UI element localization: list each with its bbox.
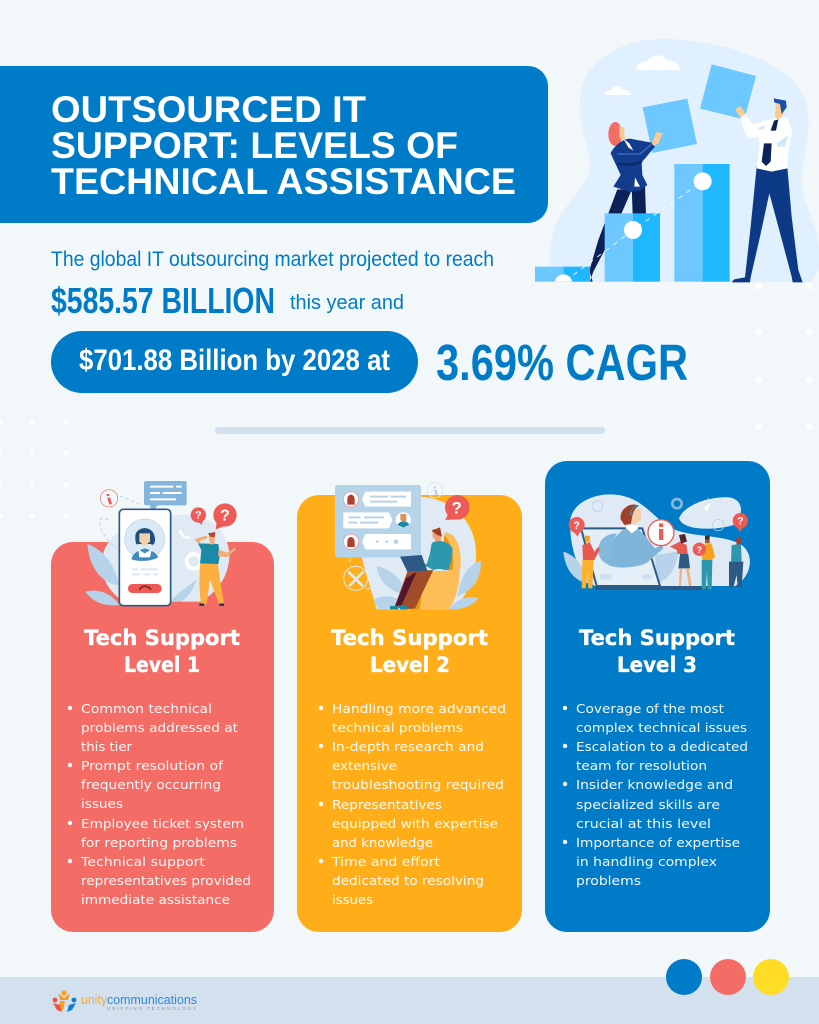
text: level 1 bullet list: Technical support <box>80 854 205 869</box>
heading: tech support level 1: Tech Support <box>84 626 240 651</box>
text: level 2 bullet list: dedicated to resolving <box>332 873 484 888</box>
text: level 2 bullet list: and knowledge <box>332 835 433 850</box>
decorative colour dots <box>666 959 789 995</box>
title banner: TECHNICAL ASSISTANCE <box>51 161 516 202</box>
pill: $701.88 billion by 2028: $701.88 Billion by 2028 at <box>79 344 390 377</box>
heading: tech support level 2: Tech Support <box>331 626 488 651</box>
text: level 2 bullet list: Representatives <box>332 797 442 812</box>
text: level 3 bullet list: problems <box>576 873 641 888</box>
text: level 2 bullet list: troubleshooting required <box>332 777 504 792</box>
icon: helpdesk agent illustration: ? <box>737 516 744 528</box>
icon: helpdesk agent illustration: ? <box>696 545 702 555</box>
text: level 1 bullet list: immediate assistance <box>81 892 230 907</box>
text: level 3 bullet list: Insider knowledge and <box>576 777 733 792</box>
text: level 2 bullet list: equipped with expertise <box>332 816 498 831</box>
icon: helpdesk agent illustration <box>563 494 750 590</box>
text: level 1 bullet list: Prompt resolution of <box>81 758 224 773</box>
heading: tech support level 2: Level 2 <box>370 653 450 678</box>
text: level 1 bullet list: for reporting problems <box>81 835 237 850</box>
text: level 3 bullet list: crucial at this level <box>576 816 711 831</box>
text: level 2 bullet list: technical problems <box>332 720 463 735</box>
market statistic intro: The global IT outsourcing market projected to reach <box>51 248 494 271</box>
text: level 3 bullet list: team for resolution <box>576 758 707 773</box>
icon: remote chat support illustration: ? <box>452 498 462 517</box>
text: this year and: this year and <box>290 292 404 314</box>
text: level 3 bullet list: in handling complex <box>576 854 718 869</box>
hero illustration: team building a bar chart <box>535 39 819 282</box>
panel: tech support level 2 <box>297 482 522 932</box>
statistic: 3.69% CAGR: 3.69% CAGR <box>436 334 688 391</box>
text: level 2 bullet list: issues <box>332 892 373 907</box>
pill: $701.88 billion by 2028 <box>51 331 418 393</box>
icon: remote chat support illustration <box>335 482 481 609</box>
heading: tech support level 2 <box>331 626 488 678</box>
heading: tech support level 3 <box>579 626 735 678</box>
text: level 3 bullet list <box>563 701 748 888</box>
panel: tech support level 3 <box>545 461 770 932</box>
text: level 1 bullet list: frequently occurring <box>81 777 221 792</box>
icon: phone support illustration: ? <box>195 510 202 522</box>
text: level 2 bullet list: extensive <box>332 758 397 773</box>
heading: tech support level 1 <box>84 626 240 678</box>
text: level 1 bullet list: problems addressed at <box>81 720 238 735</box>
footer band <box>0 977 819 1024</box>
text: level 1 bullet list: Employee ticket system <box>81 816 244 831</box>
text: level 3 bullet list: Coverage of the most <box>576 701 724 716</box>
text: level 2 bullet list <box>319 701 506 907</box>
text: level 2 bullet list: Handling more advanced <box>332 701 506 716</box>
title banner: SUPPORT: LEVELS OF <box>51 125 458 166</box>
text: level 2 bullet list: Time and effort <box>331 854 440 869</box>
icon: helpdesk agent illustration: ? <box>573 520 580 532</box>
title banner <box>0 66 548 223</box>
logo: unity communications: UNIFYING TECHNOLOGY <box>107 1006 196 1011</box>
text: level 3 bullet list: Importance of expertise <box>576 835 740 850</box>
icon: phone support illustration <box>85 481 237 606</box>
icon: phone support illustration: ? <box>220 508 230 525</box>
logo: unity communications <box>53 990 197 1012</box>
text: level 1 bullet list: this tier <box>81 739 133 754</box>
statistic: $585.57 billion: $585.57 BILLION <box>51 280 275 321</box>
panel: tech support level 1 <box>51 481 274 932</box>
logo: unity communications: unity <box>81 992 107 1007</box>
logo: unity communications: communications <box>107 992 197 1007</box>
heading: tech support level 3: Tech Support <box>579 626 735 651</box>
text: level 1 bullet list: representatives provided <box>81 873 251 888</box>
text: level 1 bullet list <box>68 701 251 907</box>
title banner: OUTSOURCED IT <box>51 89 366 130</box>
text: level 1 bullet list: issues <box>81 796 123 811</box>
text: level 1 bullet list: Common technical <box>81 701 212 716</box>
text: level 3 bullet list: Escalation to a dedicated <box>576 739 748 754</box>
heading: tech support level 1: Level 1 <box>124 653 200 678</box>
text: level 3 bullet list: complex technical issues <box>576 720 747 735</box>
heading: tech support level 3: Level 3 <box>617 653 697 678</box>
text: level 2 bullet list: In-depth research and <box>332 739 484 754</box>
text: level 3 bullet list: specialized skills are <box>576 797 720 812</box>
